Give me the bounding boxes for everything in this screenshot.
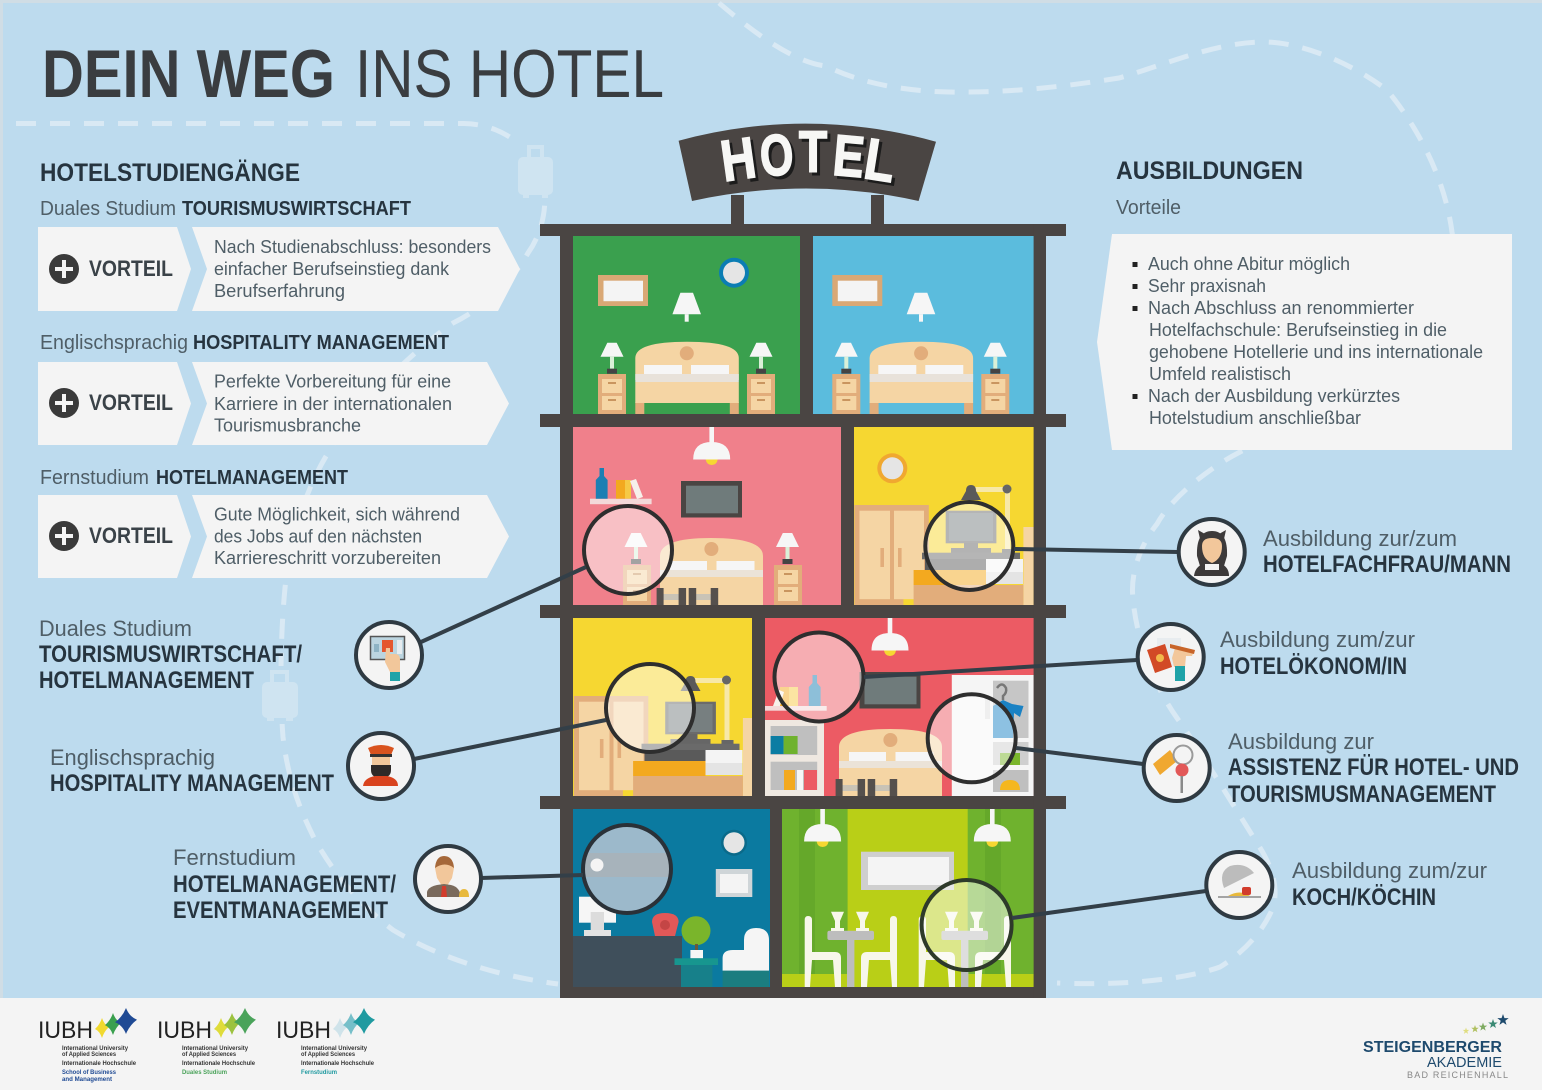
logo: iubh school of business: School of Business xyxy=(62,1070,117,1076)
label: hotelökonom: HOTELÖKONOM/IN xyxy=(1220,653,1407,680)
panel: ausbildungen xyxy=(1097,157,1512,450)
logo: iubh fernstudium: IUBH xyxy=(276,1017,331,1044)
label: englischsprachig xyxy=(50,745,334,797)
logo: iubh school of business: Internationale Hochschule xyxy=(62,1061,137,1067)
heading: ausbildungen: AUSBILDUNGEN xyxy=(1116,157,1303,185)
subheading: vorteile: Vorteile xyxy=(1116,197,1181,219)
callout: vorteile list: Hotelstudium anschließbar xyxy=(1149,408,1361,428)
panel: hotelstudiengänge xyxy=(38,159,520,578)
label: koch: Ausbildung zum/zur xyxy=(1292,858,1487,883)
room: green restaurant xyxy=(782,809,1034,988)
callout: vorteile list xyxy=(1097,234,1512,450)
vorteil row 2: Tourismusbranche xyxy=(214,416,361,436)
dashed route: top left to bottom centre xyxy=(16,124,558,984)
vorteil row 3: des Jobs auf den nächsten xyxy=(214,526,422,546)
icon: doorman xyxy=(348,733,414,799)
vorteil row 2: Perfekte Vorbereitung für eine xyxy=(214,372,451,392)
subheading: hotelmanagement xyxy=(40,467,348,489)
subheading: hotelmanagement: Fernstudium xyxy=(40,467,149,489)
icon: suitcase bottom xyxy=(258,666,302,724)
icon: cloche xyxy=(1206,852,1272,918)
magnifier: reception xyxy=(580,825,674,913)
label: duales studium: HOTELMANAGEMENT xyxy=(39,667,254,694)
title: DEIN WEG xyxy=(42,36,335,112)
vorteil row 1: Nach Studienabschluss: besonders xyxy=(214,237,491,257)
hotel sign: E xyxy=(830,123,867,191)
icon: passport and hand xyxy=(1138,624,1204,690)
label: assistenz: Ausbildung zur xyxy=(1228,729,1374,754)
label: englischsprachig: HOSPITALITY MANAGEMENT xyxy=(50,770,334,797)
callout: vorteile list: Auch ohne Abitur möglich xyxy=(1148,254,1350,274)
hotel sign: L xyxy=(860,127,900,195)
callout: vorteile list: Nach der Ausbildung verkürztes xyxy=(1148,386,1400,406)
label: koch: KOCH/KÖCHIN xyxy=(1292,884,1436,911)
label: fernstudium xyxy=(173,845,396,924)
callout: vorteile list: Umfeld realistisch xyxy=(1149,364,1291,384)
label: hotelökonom xyxy=(1220,627,1415,680)
connector lines xyxy=(414,549,1206,918)
vorteil row 3: Gute Möglichkeit, sich während xyxy=(214,504,460,524)
room: yellow office lower xyxy=(573,618,753,797)
vorteil row 1: Berufserfahrung xyxy=(214,281,345,301)
magnifier: red room wardrobe xyxy=(928,694,1016,782)
magnifier: restaurant xyxy=(922,880,1012,970)
room: yellow office upper xyxy=(854,427,1034,606)
logo: iubh duales studium xyxy=(157,1008,256,1076)
logo: iubh school of business: of Applied Sciences xyxy=(62,1052,117,1058)
vorteil row 2: VORTEIL xyxy=(89,390,173,415)
footer band xyxy=(0,998,1542,1090)
building structure xyxy=(540,224,1066,998)
logo: steigenberger akademie: STEIGENBERGER xyxy=(1363,1039,1502,1056)
room: blue bedroom xyxy=(813,236,1034,415)
subheading: hospitality management xyxy=(40,332,449,354)
logo: steigenberger akademie: BAD REICHENHALL xyxy=(1407,1070,1508,1080)
vorteil row 1: einfacher Berufseinstieg dank xyxy=(214,259,450,279)
callout: vorteile list: Nach Abschluss an renommierter xyxy=(1148,298,1414,318)
logo: iubh duales studium: Duales Studium xyxy=(182,1070,227,1076)
hotel sign xyxy=(679,120,936,225)
callout: vorteile list: Sehr praxisnah xyxy=(1148,276,1266,296)
subheading: hospitality management: Englischsprachig xyxy=(40,332,188,354)
label: assistenz: TOURISMUSMANAGEMENT xyxy=(1228,781,1496,808)
logo: iubh school of business: and Management xyxy=(62,1077,112,1083)
logo: iubh fernstudium xyxy=(276,1008,375,1076)
title: INS HOTEL xyxy=(355,36,664,112)
logo: iubh fernstudium: of Applied Sciences xyxy=(301,1052,356,1058)
label: assistenz xyxy=(1228,729,1519,808)
vorteil row 2 xyxy=(38,362,509,445)
callout: vorteile list: Hotelfachschule: Berufseinstieg in die xyxy=(1149,320,1447,340)
label: koch xyxy=(1292,858,1487,911)
hotel building xyxy=(540,120,1066,998)
room: green bedroom xyxy=(573,236,800,415)
logo: iubh school of business xyxy=(38,1008,137,1083)
subheading: hotelmanagement: HOTELMANAGEMENT xyxy=(156,467,348,489)
logo: steigenberger akademie xyxy=(1363,1014,1509,1080)
label: hotelfachfrau xyxy=(1263,526,1511,578)
vorteil row 3: VORTEIL xyxy=(89,523,173,548)
logo: iubh fernstudium: International University xyxy=(301,1046,368,1052)
logo: iubh duales studium: Internationale Hochschule xyxy=(182,1061,256,1067)
title xyxy=(42,36,664,112)
label: fernstudium: HOTELMANAGEMENT/ xyxy=(173,871,396,898)
vorteil row 1 xyxy=(38,227,520,311)
vorteil row 3: Karriereschritt vorzubereiten xyxy=(214,548,441,568)
magnifier: red room shelf xyxy=(774,632,864,722)
label: englischsprachig: Englischsprachig xyxy=(50,745,215,770)
room: teal reception xyxy=(573,809,770,988)
hotel sign: O xyxy=(758,122,796,189)
label: hotelökonom: Ausbildung zum/zur xyxy=(1220,627,1415,652)
logo: iubh duales studium: International University xyxy=(182,1046,249,1052)
label: duales studium: Duales Studium xyxy=(39,616,192,641)
hotel sign: T xyxy=(799,120,827,185)
logo: iubh school of business: International University xyxy=(62,1046,129,1052)
icon: manager xyxy=(415,846,481,912)
subheading: tourismuswirtschaft: Duales Studium xyxy=(40,198,176,220)
subheading: tourismuswirtschaft: TOURISMUSWIRTSCHAFT xyxy=(182,198,411,220)
label: fernstudium: Fernstudium xyxy=(173,845,296,870)
magnifier: lower yellow room xyxy=(606,664,694,752)
callout: vorteile list: gehobene Hotellerie und ins internationale xyxy=(1149,342,1483,362)
label: duales studium xyxy=(39,616,302,694)
dashed route: top right to bottom right xyxy=(719,3,1454,984)
logo: steigenberger akademie: AKADEMIE xyxy=(1427,1054,1502,1071)
icon: tablet hand xyxy=(356,622,422,688)
room: pink bedroom xyxy=(573,427,841,606)
subheading: hospitality management: HOSPITALITY MANAGEMENT xyxy=(193,332,449,354)
vorteil row 3 xyxy=(38,495,509,578)
magnifier: pink room lamp xyxy=(584,506,672,594)
logo: iubh duales studium: IUBH xyxy=(157,1017,212,1044)
icon: maid xyxy=(1179,519,1245,585)
heading: hotelstudiengänge: HOTELSTUDIENGÄNGE xyxy=(40,159,300,187)
logo: iubh fernstudium: Internationale Hochschule xyxy=(301,1061,375,1067)
label: fernstudium: EVENTMANAGEMENT xyxy=(173,897,388,924)
hotel sign: H xyxy=(717,126,760,194)
logo: iubh duales studium: of Applied Sciences xyxy=(182,1052,237,1058)
room: red bedroom xyxy=(765,618,1034,797)
vorteil row 2: Karriere in der internationalen xyxy=(214,394,452,414)
subheading: tourismuswirtschaft xyxy=(40,198,411,220)
logo: iubh school of business: IUBH xyxy=(38,1017,93,1044)
logo: iubh fernstudium: Fernstudium xyxy=(301,1070,337,1076)
icon: keys xyxy=(1144,735,1210,801)
magnifier: yellow room monitor xyxy=(925,502,1013,590)
icon: suitcase top xyxy=(514,140,558,202)
label: duales studium: TOURISMUSWIRTSCHAFT/ xyxy=(39,641,302,668)
label: hotelfachfrau: Ausbildung zur/zum xyxy=(1263,526,1457,551)
vorteil row 1: VORTEIL xyxy=(89,256,173,281)
